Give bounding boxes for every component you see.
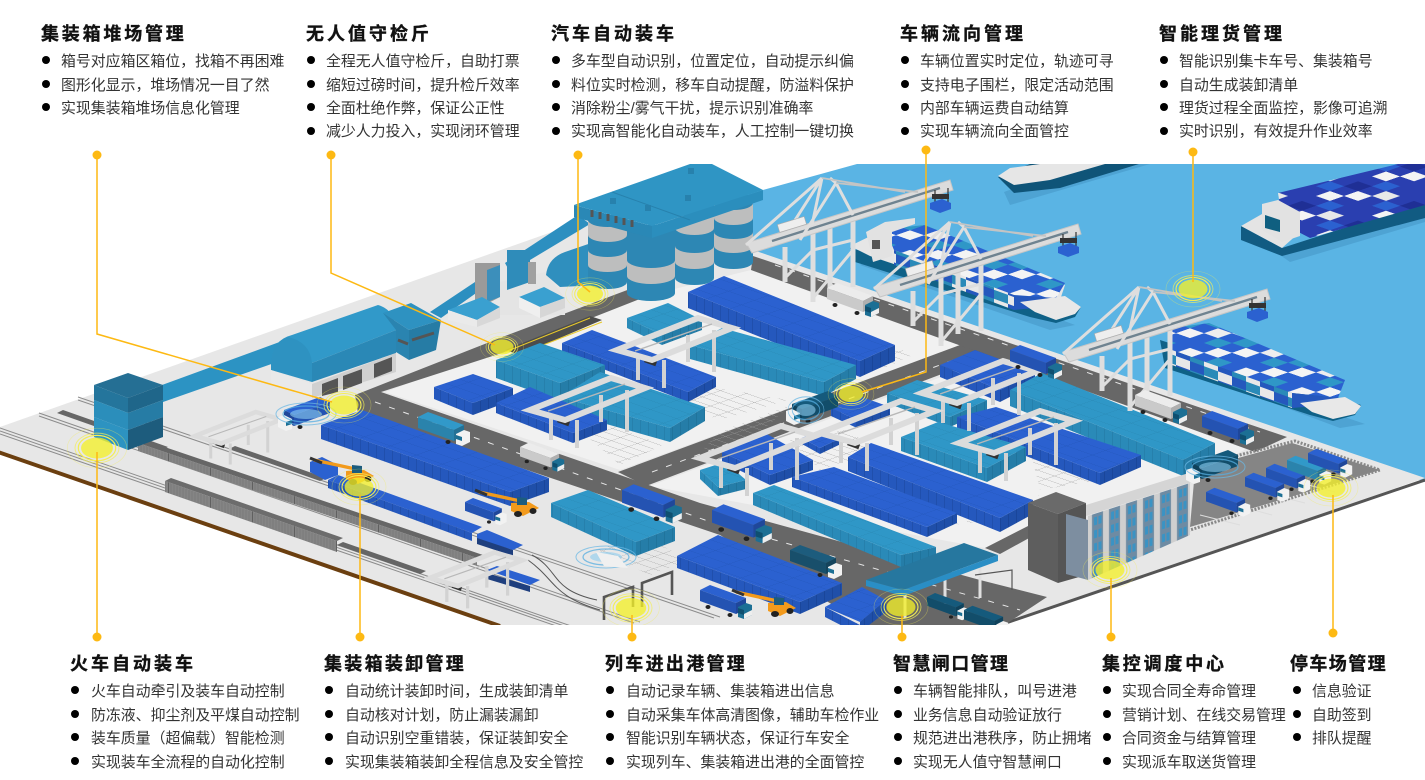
block: 集装箱装卸管理: 集装箱装卸管理 [324,653,466,674]
block: 火车自动装车 [70,653,299,771]
container stack: M [1010,373,1215,476]
silo column 3 [675,205,714,285]
block: 集装箱堆场管理 [41,23,284,117]
container stack: T [722,433,813,485]
container stack: D [496,343,605,401]
block: 无人值守检斤: 减少人力投入，实现闭环管理 [326,123,520,140]
block: 汽车自动装车: 料位实时检测，移车自动提醒，防溢料保护 [571,77,854,94]
container stack: U [831,397,890,428]
block: 集控调度中心: 实现派车取送货管理 [1122,754,1256,771]
block: 车辆流向管理: 内部车辆运费自动结算 [920,100,1069,117]
block: 车辆流向管理: 车辆位置实时定位，轨迹可寻 [920,53,1114,70]
container stack: G [496,387,607,443]
block: 停车场管理 [1290,653,1387,747]
container stack: W [700,465,745,496]
freight wagons [57,410,483,574]
container stack: L [940,350,1035,402]
trucks [278,283,1352,635]
block: 汽车自动装车: 汽车自动装车 [551,23,677,44]
container stack: E [560,372,705,442]
block: 智慧闸口管理: 车辆智能排队，叫号进港 [913,682,1077,700]
block: 列车进出港管理: 实现列车、集装箱进出港的全面管控 [626,753,864,771]
block: 汽车自动装车: 多车型自动识别，位置定位，自动提示纠偏 [571,53,854,70]
block: 无人值守检斤: 全程无人值守检斤，自助打票 [326,52,520,70]
train with blue cars [328,475,540,592]
block: 集装箱堆场管理: 图形化显示，堆场情况一目了然 [61,77,270,94]
yard areas [385,270,1250,548]
block: 智慧闸口管理: 实现无人值守智慧闸口 [913,753,1062,771]
conveyor: long [162,340,297,402]
block: 集装箱装卸管理: 自动识别空重错装，保证装卸安全 [345,729,568,747]
silo column 1 [588,215,627,289]
block: 智慧闸口管理 [893,653,1092,771]
loading building [383,303,441,360]
container stack: R [792,467,957,537]
block: 集装箱堆场管理: 箱号对应箱区箱位，找箱不再困难 [61,52,284,70]
block: 停车场管理: 信息验证 [1312,683,1372,700]
yard gantry cranes [195,318,1074,608]
road markings [375,265,1260,610]
quay crane 2 [874,222,1081,346]
block: 智慧闸口管理: 智慧闸口管理 [893,653,1009,674]
block: 车辆流向管理: 车辆流向管理 [900,23,1026,44]
container stack: A [688,276,895,377]
leader dots [92,146,1338,642]
container stack: N [887,380,987,427]
block: 火车自动装车: 防冻液、抑尘剂及平煤自动控制 [91,706,299,724]
ground edge: brown side [0,452,500,626]
reach stackers [310,457,796,617]
factory cluster [448,250,565,327]
transfer tower [94,373,163,450]
ground edge: dark side [1000,480,1425,625]
block: 火车自动装车: 实现装车全流程的自动化控制 [91,753,285,771]
block: 列车进出港管理: 自动记录车辆、集装箱进出信息 [626,683,835,700]
gate frames [604,572,672,620]
parking lot [1190,443,1380,527]
container stack: F [434,374,513,415]
block: 集控调度中心: 集控调度中心 [1102,653,1227,674]
block: 停车场管理: 自助签到 [1312,707,1372,724]
small hangar behind silos [546,240,600,287]
container stack: small teal [627,303,702,345]
block: 汽车自动装车: 消除粉尘/雾气干扰，提示识别准确率 [571,100,813,117]
rail tracks [0,397,720,629]
block: 集装箱装卸管理: 自动统计装卸时间，生成装卸清单 [345,683,568,700]
block: 集装箱装卸管理: 实现集装箱装卸全程信息及安全管控 [345,753,583,771]
road network [355,256,1287,628]
weighbridge lane [505,316,602,355]
block: 列车进出港管理: 智能识别车辆状态，保证行车安全 [626,729,849,747]
container stack: H [321,410,549,506]
block: 集控调度中心: 营销计划、在线交易管理 [1122,706,1286,724]
container stack: I [551,490,675,556]
block: 集装箱装卸管理 [324,653,583,771]
ground platform [0,215,1425,625]
ship: top center [998,164,1150,205]
container stack: O [957,407,1141,485]
block: 智能理货管理: 自动生成装卸清单 [1179,77,1298,94]
container stack: C [562,330,716,402]
block: 智慧闸口管理: 规范进出港秩序，防止拥堵 [913,730,1092,747]
block: 无人值守检斤: 全面杜绝作弊，保证公正性 [326,99,505,117]
block: 集装箱堆场管理: 集装箱堆场管理 [41,23,187,44]
block: 车辆流向管理: 实现车辆流向全面管控 [920,122,1069,140]
yard grids [583,347,1100,575]
block: 智能理货管理: 实时识别，有效提升作业效率 [1179,123,1373,140]
block: 车辆流向管理: 支持电子围栏，限定活动范围 [920,77,1114,94]
block: 智慧闸口管理: 业务信息自动验证放行 [913,707,1062,724]
wireless rings near trucks [276,397,1245,568]
dispatch building [1066,472,1192,580]
block: 智能理货管理: 智能识别集卡车号、集装箱号 [1179,52,1373,70]
container stack: B [690,328,856,396]
block: 集控调度中心: 合同资金与结算管理 [1122,730,1256,747]
gate canopy [866,543,1012,618]
block: 集控调度中心 [1102,653,1286,771]
block: 停车场管理: 排队提醒 [1312,730,1372,747]
ship: berth 1 [850,218,1081,330]
block: 集装箱堆场管理: 实现集装箱堆场信息化管理 [61,100,240,117]
block: 无人值守检斤: 缩短过磅时间，提升检斤效率 [326,77,520,94]
hangar [271,305,396,398]
container stack: S [753,485,936,567]
quay crane 3 [1063,287,1270,411]
silo column 4 [714,195,753,269]
container stack: V [802,430,843,454]
control tower [1028,492,1086,583]
block: 无人值守检斤 [306,23,520,140]
block: 列车进出港管理: 列车进出港管理 [605,653,747,674]
block: 智能理货管理: 智能理货管理 [1159,23,1285,44]
block: 列车进出港管理: 自动采集车体高清图像，辅助车检作业 [626,707,879,724]
hotspots [67,271,1358,627]
parking fence [1190,439,1380,532]
block: 无人值守检斤: 无人值守检斤 [306,23,432,44]
block: 火车自动装车: 装车质量（超偏载）智能检测 [91,729,285,747]
block: 智能理货管理 [1159,23,1387,140]
block: 汽车自动装车 [551,23,854,140]
block: 集控调度中心: 实现合同全寿命管理 [1122,682,1256,700]
block: 智能理货管理: 理货过程全面监控，影像可追溯 [1179,99,1387,117]
block: 停车场管理: 停车场管理 [1290,653,1387,674]
silo roof [574,164,763,238]
silo column 2 [627,225,675,301]
water [745,164,1425,482]
ship: berth 2 [1160,323,1365,428]
container stack: K [825,587,886,625]
block: 列车进出港管理 [605,653,879,771]
conveyor: to silo [430,215,590,318]
ship: top right [1241,164,1425,262]
leader lines [97,150,1333,637]
block: 火车自动装车: 火车自动牵引及装车自动控制 [91,683,285,700]
truck in signal zone [596,552,628,568]
block: 火车自动装车: 火车自动装车 [70,653,196,674]
container stack: P [901,422,1026,482]
block: 车辆流向管理 [900,23,1114,140]
block: 集装箱装卸管理: 自动核对计划，防止漏装漏卸 [345,707,539,724]
block: 汽车自动装车: 实现高智能化自动装车，人工控制一键切换 [571,122,854,140]
container stack: J [677,535,842,614]
port scene illustration [0,164,1425,635]
container stack: Q [848,443,1033,532]
quay crane 1 [746,178,953,302]
